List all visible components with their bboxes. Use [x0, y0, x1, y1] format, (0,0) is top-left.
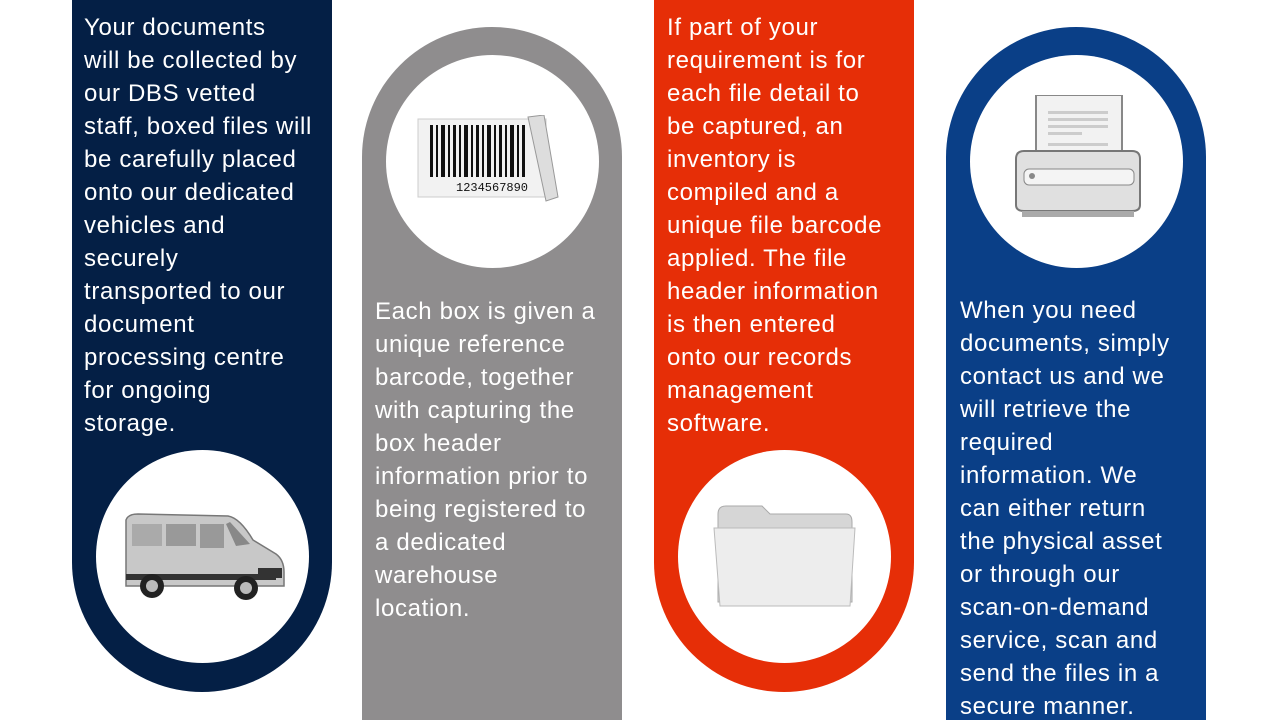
- text: collection: [84, 14, 312, 437]
- text: box barcode: barcode, together: [375, 364, 574, 391]
- text: file inventory: unique file barcode: [667, 212, 882, 239]
- text: box barcode: location.: [375, 595, 470, 622]
- text: box barcode: box header: [375, 430, 502, 457]
- text: box barcode: information prior to: [375, 463, 588, 490]
- text: collection: securely: [84, 245, 179, 272]
- panel: file inventory (red): [654, 0, 914, 692]
- text: box barcode: a dedicated: [375, 529, 506, 556]
- text: box barcode: Each box is given a: [375, 298, 595, 325]
- text: collection: will be collected by: [84, 47, 297, 74]
- text: box barcode: unique reference: [375, 331, 566, 358]
- panel: collection (navy): [72, 0, 332, 692]
- text: file inventory: is then entered: [667, 311, 836, 338]
- panel: box barcode (grey): [362, 27, 622, 720]
- text: retrieval: documents, simply: [960, 330, 1170, 357]
- text: file inventory: requirement is for: [667, 47, 865, 74]
- text: collection: document: [84, 311, 195, 338]
- icon: barcode label: 1234567890: [456, 181, 528, 195]
- panel: retrieval (blue): [946, 27, 1206, 720]
- text: retrieval: required: [960, 429, 1053, 456]
- text: retrieval: will retrieve the: [960, 396, 1131, 423]
- text: file inventory: [667, 14, 882, 437]
- text: file inventory: each file detail to: [667, 80, 859, 107]
- text: retrieval: When you need: [960, 297, 1137, 324]
- text: box barcode: with capturing the: [375, 397, 575, 424]
- text: file inventory: software.: [667, 410, 770, 437]
- text: retrieval: secure manner.: [960, 693, 1135, 720]
- text: box barcode: [375, 298, 595, 622]
- text: retrieval: information. We: [960, 462, 1137, 489]
- text: collection: Your documents: [84, 14, 266, 41]
- icon: barcode label: [418, 115, 558, 202]
- text: file inventory: If part of your: [667, 14, 818, 41]
- icon: folder: [714, 506, 856, 606]
- text: retrieval: [960, 297, 1170, 720]
- text: file inventory: be captured, an: [667, 113, 844, 140]
- text: collection: onto our dedicated: [84, 179, 295, 206]
- text: collection: be carefully placed: [84, 146, 296, 173]
- icon: van: [125, 513, 285, 600]
- text: retrieval: or through our: [960, 561, 1120, 588]
- text: collection: vehicles and: [84, 212, 225, 239]
- text: collection: for ongoing: [84, 377, 211, 404]
- text: retrieval: contact us and we: [960, 363, 1165, 390]
- text: retrieval: the physical asset: [960, 528, 1162, 555]
- text: retrieval: scan-on-demand: [960, 594, 1149, 621]
- text: collection: our DBS vetted: [84, 80, 256, 107]
- text: collection: staff, boxed files will: [84, 113, 312, 140]
- text: collection: processing centre: [84, 344, 284, 371]
- text: retrieval: can either return: [960, 495, 1146, 522]
- text: collection: storage.: [84, 410, 176, 437]
- text: file inventory: compiled and a: [667, 179, 839, 206]
- icon: printer: [1015, 95, 1141, 217]
- text: file inventory: header information: [667, 278, 879, 305]
- text: file inventory: inventory is: [667, 146, 796, 173]
- text: retrieval: service, scan and: [960, 627, 1158, 654]
- text: collection: transported to our: [84, 278, 285, 305]
- text: file inventory: management: [667, 377, 814, 404]
- text: file inventory: applied. The file: [667, 245, 847, 272]
- icon circle: van: [96, 450, 309, 663]
- icon circle: printer: [970, 55, 1183, 268]
- text: retrieval: send the files in a: [960, 660, 1159, 687]
- icon circle: folder: [678, 450, 891, 663]
- text: file inventory: onto our records: [667, 344, 852, 371]
- text: box barcode: being registered to: [375, 496, 586, 523]
- text: box barcode: warehouse: [375, 562, 498, 589]
- icon circle: barcode: [386, 55, 599, 268]
